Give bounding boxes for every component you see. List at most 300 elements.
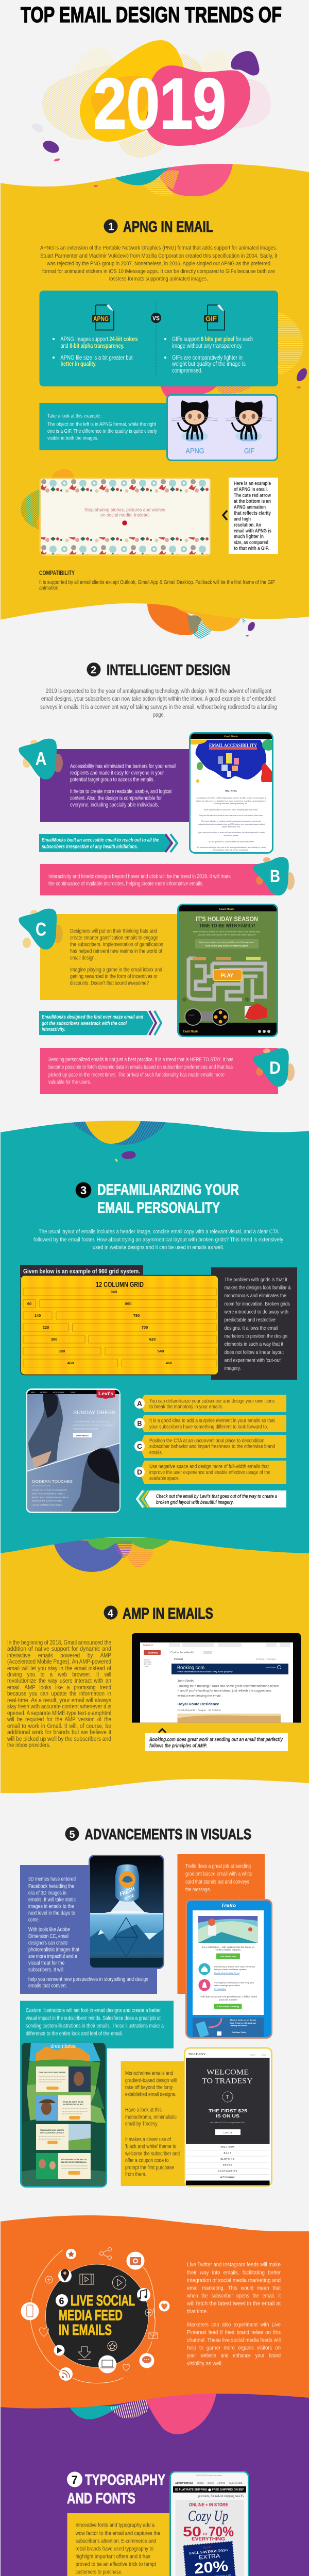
text block: AMP description: In the beginning of 2018, Gmail announced the (7, 1640, 111, 1646)
badge D (253, 1048, 295, 1087)
page background (0, 0, 309, 1108)
chart: 960 grid system: 460 (166, 1361, 172, 1365)
tip D: D (137, 1468, 142, 1476)
heading: 6 live social media feed (56, 2293, 135, 2338)
panel: typography description: retail brands have used typography to (76, 2546, 153, 2552)
image: octocat APNG vs GIF (167, 395, 277, 461)
heading: 6 live social media feed: MEDIA FEED (59, 2307, 123, 2324)
panel A: accessibility: potential target group to access the emails. (70, 777, 154, 783)
panel: 3D images: subscribers. It will (28, 1967, 63, 1973)
image: Levi's broken grid email phone: KIDS & BABY (53, 1392, 64, 1394)
panel: 3D images: era of 3D images in (28, 1890, 66, 1896)
badge A: A (35, 748, 46, 769)
heading: 3 defamiliarizing your email personality: EMAIL PERSONALITY (97, 1199, 220, 1216)
image: Salesforce Dreamforce email phone (21, 2042, 106, 2187)
GIF bullet list: GIFs support 8 bits per pixel for each (172, 336, 253, 343)
image: Aeropostale email phone: GIRLS (197, 2482, 204, 2484)
image: Tradesy email phone: USE IT (224, 2131, 232, 2134)
image: Levi's broken grid email phone: SUNDAY DRESS (73, 1410, 115, 1416)
callout: APNG example note: The cute red arrow (234, 493, 271, 498)
badge C: C (36, 919, 46, 940)
image: Salesforce Dreamforce email phone: SALESFORCE 01 JUS INST (63, 2104, 84, 2106)
section 6 background with wave (0, 2210, 309, 2409)
panel: 3D images: emails. It will take static (28, 1897, 76, 1903)
APNG bullet list: APNG file size is a bit greater but (61, 355, 133, 361)
image: Booking.com Gmail screenshot (132, 1633, 301, 1723)
text block: APNG compatibility (39, 570, 275, 591)
panel D: personalized emails: Sending personalized emails is not just a best practice, it is a trend that is HERE TO STAY. It has (48, 1057, 233, 1063)
heading: 7 typography and fonts: 7 (71, 2473, 78, 2486)
image: Tradesy email phone: SELL NOW (220, 2145, 235, 2148)
chart: 960 grid system: 620 (149, 1337, 156, 1342)
image: holiday maze game email phone: Email Monks (218, 908, 234, 911)
image: 3D juice can email phone: JUICE (124, 1894, 135, 1901)
text block: live social feed description: help to garner more organic visitors on (187, 2345, 281, 2351)
chart: 960 grid system: 300 (51, 1337, 57, 1342)
image: Tradesy email phone: BAGS (224, 2151, 231, 2155)
image: holiday maze game email phone: PLAY (221, 973, 234, 979)
panel: grids explanation: elements in such a way that it (225, 1341, 283, 1347)
hero blob illustration (31, 40, 271, 162)
image: 3D juice can email phone: FRESH (119, 1886, 136, 1897)
panel C: gamification: discounts. Doesn't that sound awesome? (70, 980, 149, 986)
image: Booking.com Gmail screenshot: Booking.com (177, 1665, 204, 1671)
tip C: subscriber behavior and impart freshness to the otherwise bland (149, 1444, 275, 1450)
panel: 3D images (20, 1865, 157, 1994)
panel: monochrome emails: Monochrome emails and (125, 2070, 173, 2076)
section 7 background with wave and blobs (0, 2385, 309, 2576)
panel: monochrome emails: prompt the first purchase (125, 2165, 174, 2171)
intro paragraph: grids: followed by the email footer. How about trying an asymmetrical layout with broken grids? This trend is extensively (33, 1236, 283, 1243)
image: Aeropostale email phone: 50 (183, 2524, 201, 2539)
image: Tradesy email phone (184, 2048, 272, 2186)
callout: APNG example note: APNG animation (234, 504, 266, 510)
tip B: It is a good idea to add a surprise element in your emails so that (149, 1418, 275, 1424)
panel: monochrome emails: gradient-based design will (125, 2077, 177, 2083)
image: holiday APNG email (40, 478, 210, 555)
panel: 3D images: are more impactful and a (28, 1954, 77, 1960)
image: email accessibility phone: proper alternative text. (222, 826, 241, 828)
panel B: interactivity: the continuance of mailable microsites, helping create more informative emails. (48, 881, 203, 887)
chart: 960 grid system: 460 (67, 1361, 74, 1365)
image: Aeropostale email phone: TO (202, 2533, 208, 2536)
panel: example explanation: one is a GIF. The difference in the quality is quite clearly (47, 428, 158, 434)
image: Levi's broken grid email phone: FREEDOM OF A PERFECT SUMMER (73, 1424, 114, 1426)
panel: custom illustrations: Custom illustrations will set foot in email designs and create a better (26, 2007, 161, 2013)
image: Trello email phone: Grab Trello for iOS, Android, (230, 2022, 256, 2024)
page background: middle (0, 1108, 309, 2205)
tip B: B (137, 1419, 142, 1427)
image: holiday maze game email phone: Can you help Mann reunite with his family this holiday season? (198, 934, 256, 936)
chart: 960 grid system: Given below is an example of 960 grid system. (23, 1268, 140, 1275)
image: holiday maze game email phone: Click on the play button to start the game. (205, 945, 249, 947)
image: Trello email phone: Desktop and more. (230, 2025, 247, 2027)
section 2 background with wave and blobs (0, 592, 309, 1108)
image: email accessibility phone: They use the web and email as much as others, but do not access it like them. (199, 815, 263, 817)
text block: AMP description: revolutionize the way users interact with an (7, 1678, 111, 1684)
image: Trello email phone: It's a celebration – with updates! Get the scoop on (202, 1946, 255, 1948)
image: Booking.com Gmail screenshot: Royal Route Residence (177, 1702, 219, 1706)
arrow note: EmailMonks accessible email: subscribers irrespective of any health inhibitions. (42, 844, 138, 850)
text block: live social feed description: your website and enhance your brand (187, 2352, 281, 2359)
panel: example explanation (39, 403, 168, 450)
panel D: personalized emails (40, 1048, 278, 1094)
panel: 3D images: With tools like Adobe (28, 1927, 70, 1933)
panel: monochrome emails: from them. (125, 2171, 146, 2177)
callout: APNG example note: that reflects clarity (234, 511, 271, 516)
image: email accessibility phone: Hey Friend, (225, 789, 237, 792)
image: Tradesy email phone: IS ON US (216, 2114, 240, 2119)
tip D: improve the user experience and enable effective usage of the (149, 1469, 270, 1476)
intro paragraph: APNG: was rejected by the PNG group in 2007. Nonetheless, in 2016, Apple singled out APNG as the preferred (46, 261, 270, 267)
panel B: interactivity: Interactivity and kinetic designs beyond hover and click will be the trend in 2019. It will mark (48, 874, 231, 880)
image: Trello email phone: Trello (221, 1903, 236, 1908)
tip A (134, 1395, 286, 1412)
image: Salesforce Dreamforce email phone: WITH SALESFORCE & GOOGLE (40, 2132, 64, 2134)
arrow note: maze email (39, 1011, 161, 1035)
image: Aeropostale email phone (170, 2472, 248, 2576)
tip D: Use negative space and design more of full-width emails that (149, 1463, 269, 1469)
panel: Trello gradient email (177, 1854, 265, 1994)
panel C: gamification: getting rewarded in the form of incentives or (70, 974, 158, 980)
image: Trello email phone: Trello's newest features. (215, 1948, 241, 1951)
image: Tradesy email phone: TRADESY (188, 2053, 207, 2056)
image: Aeropostale email phone: EXTRA (199, 2553, 220, 2561)
text block: AMP description: driving you to a web browser. It will (7, 1672, 111, 1678)
intro paragraph: intelligent design: 2019 is expected to be the year of amalgamating technology with design. With the advent of intelligent (46, 688, 272, 694)
callout: Booking.com note: follows the principles of AMP. (149, 1742, 207, 1749)
icon: VS badge: VS (152, 314, 160, 321)
icons: filled social circles (21, 2249, 170, 2381)
icon: APNG file (92, 304, 114, 330)
panel: monochrome emails: 'black and white' theme to (125, 2143, 176, 2149)
panel: monochrome emails: email by Tradesy. (125, 2121, 158, 2127)
text block: AMP description: opened. A separate MIME-type text-x-amphtml (7, 1710, 111, 1717)
chart: 960 grid system: 60 (27, 1301, 31, 1306)
image: Tradesy email phone: WELCOME (207, 2068, 249, 2076)
image: Aeropostale email phone: THE EXTRA 20% off online and in stores (196, 2475, 222, 2477)
image: holiday maze game email phone (178, 905, 277, 1037)
text block: AMP description: additional work for brands but we believe it (7, 1730, 112, 1736)
text block: AMP description: real-time. As a result, your email will always (7, 1698, 111, 1704)
image: Aeropostale email phone: just more, limited-ish shipping now $5 (198, 2494, 244, 2498)
image: Booking.com Gmail screenshot: 10:12 AM (1 hour ago) (256, 1658, 276, 1660)
panel: typography description (67, 2513, 170, 2576)
text block: AMP description: email. AMP looks like a promising trend (7, 1685, 111, 1691)
image: Aeropostale email phone: CLEARANCE (229, 2482, 243, 2484)
image: Booking.com Gmail screenshot: FREE cancellation on most rooms · Pay at the property (177, 1671, 233, 1673)
panel: 3D images: images in emails to the (28, 1903, 74, 1909)
arrow note: maze email: interactivity. (42, 1026, 65, 1032)
panel: 3D images: 3D memes have entered (28, 1876, 76, 1883)
image: Booking.com Gmail screenshot: Important (144, 1661, 151, 1663)
hero year 2019: 2019 (93, 64, 226, 144)
image: Trello email phone (186, 1900, 272, 2038)
text block: APNG compatibility: animation. (39, 585, 60, 591)
callout: APNG example note (229, 478, 278, 554)
panel: custom illustrations: sending custom illustrations in their emails. These illustrations make a (26, 2023, 164, 2029)
image: Tradesy email phone: TO TRADESY (202, 2077, 253, 2086)
panel: grids explanation: were introduced to do away with (224, 1309, 288, 1315)
image: email accessibility phone: We partnered with Pepe Kay, one of the leading authorities on accessibility, to create (197, 846, 266, 849)
image: email accessibility phone: Email Monks (224, 735, 238, 738)
intro paragraph: grids: The usual layout of emails includes a header image, concise email copy with a relevant visual, and a clear CTA (39, 1229, 279, 1235)
image: Trello email phone: Check Out Activity Feed (214, 1972, 239, 1974)
image: Trello email phone: better manage your alerts. (214, 1984, 241, 1987)
callout: Booking.com note (145, 1733, 288, 1751)
panel: 3D images: designers can create (28, 1940, 68, 1946)
image: email accessibility phone: They face difficulty in reading complex paragraphs passages, coming at (201, 820, 261, 822)
heading: 4 AMP in emails (104, 1605, 213, 1622)
text block: AMP description: stay fresh with accurate content whenever it is (7, 1704, 111, 1710)
text block: live social feed description: Marketers can also experiment with Live (187, 2321, 281, 2328)
image: Salesforce Dreamforce email phone: TRAILBLAZER INLTA (63, 2101, 83, 2103)
text block: live social feed description: integration of social media marketing and (187, 2277, 281, 2283)
heading: 2 intelligent design: 2 (91, 665, 96, 676)
panel C: gamification (40, 914, 177, 1000)
heading: 5 advancements in visuals: 5 (69, 1829, 75, 1840)
panel: 3D images: Facebook heralding the (28, 1884, 74, 1890)
panel: monochrome emails: welcome the subscriber and (125, 2150, 180, 2157)
APNG bullet list: better in quality. (61, 361, 97, 367)
heading: 6 live social media feed: IN EMAILS (59, 2322, 112, 2338)
arrow note: maze email: got the subscribers awestruck with the cool (41, 1020, 127, 1026)
panel: 3D images: visual treat for the (28, 1960, 65, 1966)
chart: 960 grid system: 780 (133, 1313, 140, 1318)
tip D: available space. (149, 1476, 180, 1482)
panel: grids explanation: imagery. (225, 1365, 241, 1371)
panel: grids explanation (211, 1267, 297, 1380)
text block: AMP description (7, 1640, 112, 1749)
text block: live social feed description: their way into emails, facilitating better (187, 2270, 281, 2276)
intro paragraph: APNG: Stuart Parmenter and Vladimir Vukićević from Mozilla Corporation created this specification in 2004. Sadly, it (40, 253, 277, 259)
panel: grids explanation: predictable and restrictive (225, 1317, 276, 1323)
image: Salesforce Dreamforce email phone: TURN IDEAS INTO APPS, FASTER (39, 2072, 65, 2074)
image: holiday maze game email phone: Use arrow keys to move and help Mann find his way home. (199, 941, 254, 943)
image: Booking.com Gmail screenshot: Sent Mail (144, 1663, 151, 1665)
text block: live social feed description: Live Twitter and Instagram feeds will make (187, 2262, 281, 2268)
image: email accessibility phone: According to the World Health Organization, out of 7.5 billion people on this planet, 1 (197, 797, 266, 799)
panel: typography description: customers to purchase. (76, 2569, 123, 2575)
callout: APNG example note: to that with a GIF. (234, 546, 269, 552)
panel C: gamification: email design. (70, 955, 96, 961)
panel C: gamification: create smarter gamification emails to engage (70, 935, 158, 941)
GIF bullet list: compromised. (172, 368, 202, 374)
intro paragraph: APNG: APNG is an extension of the Portable Network Graphics (PNG) format that adds support for animated images. (40, 245, 277, 251)
text block: live social feed description: Pinterest feed if their brand relies on this (187, 2330, 281, 2336)
image: Levi's broken grid email phone: CUTOUT TO CATCH THOSE (32, 1500, 62, 1502)
image: Booking.com Gmail screenshot: Custom homefeeds! (170, 1651, 194, 1654)
social circle illustration with heading (21, 2247, 170, 2383)
badge A (19, 739, 63, 779)
image: holiday maze game email phone: Email Monks (182, 1029, 198, 1033)
image: Levi's broken grid email phone: LIGHT ON YOUR SHOULDERS (32, 1489, 67, 1491)
panel: example explanation: The object on the left is in APNG format, while the right (47, 421, 156, 428)
image: Salesforce Dreamforce email phone: SALESFORCE ESSENTIALS (61, 2161, 87, 2163)
decorative blobs around comparison panel (160, 311, 307, 399)
panel: 3D images: Dimension CC, email (28, 1933, 68, 1939)
callout: APNG example note: resolution. An (234, 522, 261, 528)
image: Aeropostale email phone: 70% (209, 2524, 234, 2539)
panel A: accessibility: everyone, including specially able individuals. (70, 802, 159, 808)
section 4 background with wave and blobs (0, 1530, 309, 1798)
tip B: your subscribers have something different to look forward to. (149, 1424, 268, 1430)
badge C (19, 909, 63, 950)
icon: GIF file: GIF (205, 315, 217, 323)
image: Aeropostale email phone: FALL SAVINGS PASS (189, 2548, 228, 2555)
heading: 2 intelligent design: INTELLIGENT DESIGN (107, 662, 230, 679)
intro paragraph: APNG: format for animated stickers in iOS 10 iMessage apps. It can be directly compared to GIFs because both are (42, 268, 275, 275)
panel: monochrome emails: established email designs. (125, 2092, 176, 2098)
image: Levi's broken grid email phone: WEEKEND EMBODIED (73, 1428, 98, 1430)
intro paragraph: intelligent design (40, 688, 277, 718)
panel: custom illustrations: visual impact in the subscribers' minds. Salesforce does a great job at (26, 2015, 161, 2022)
badge B: B (270, 867, 280, 886)
image: Booking.com Gmail screenshot: Gmail ▾ (143, 1644, 153, 1647)
tip A: You can defamiliarize your subscriber and design your own icons (149, 1398, 275, 1404)
GIF bullet list: image without any transparency. (172, 343, 243, 349)
image: 3D juice can email phone (90, 1856, 164, 1968)
image: Tradesy email phone: SELL (262, 2054, 266, 2056)
panel: grids explanation: does not follow a linear layout (225, 1349, 284, 1355)
image: Booking.com Gmail screenshot: John Smith, (177, 1680, 195, 1683)
text block: live social feed description: visibility as well. (187, 2361, 222, 2367)
text block: live social feed description: when the subscriber opens the email, it (186, 2293, 281, 2299)
image: Booking.com Gmail screenshot: – and if you're looking for more ideas, just refresh the suggestions (177, 1689, 272, 1693)
image: holiday maze game email phone: Mann's family is waiting for him to reach home. But he has lost his way. (193, 930, 260, 933)
image: Aeropostale email phone: ONLINE + IN STORE (189, 2503, 229, 2507)
heading: 6 live social media feed: 6 (59, 2296, 64, 2306)
icon: red arrow (122, 520, 127, 526)
panel: grids explanation: monotonous and eliminates the (225, 1293, 286, 1299)
text block: AMP description: interactive emails powered by AMP (7, 1653, 111, 1659)
panel A: accessibility: It helps to create more readable, usable, and logical (70, 788, 171, 794)
section 1 background with wave and blobs (0, 149, 309, 623)
image: Trello email phone: Reimagined notifications that help you (214, 1981, 254, 1984)
panel C: gamification: the subscribers. Implementation of gamification (70, 942, 163, 948)
image: octocat APNG vs GIF: GIF (244, 447, 254, 455)
image: Levi's broken grid email phone: Levi's (98, 1391, 113, 1396)
intro paragraph: grids (33, 1229, 283, 1251)
image: Levi's broken grid email phone: MODERN TOUCHES (32, 1480, 73, 1484)
callout: APNG example note: at the bottom is an (234, 499, 271, 504)
panel: example explanation: Take a look at this example. (47, 413, 101, 419)
panel: monochrome emails: It makes a clever use of (125, 2137, 171, 2143)
heading: 1 APNG in email: 1 (108, 221, 114, 233)
panel: Trello gradient email: gradient-based email with a white (185, 1871, 252, 1877)
image: email accessibility phone (190, 733, 274, 853)
arrow note: EmailMonks accessible email: EmailMonks built an accessible email to reach out to all the (42, 837, 159, 843)
tip C: emails. (149, 1450, 163, 1456)
icon: VS badge (151, 313, 161, 323)
icons: outline symbols (40, 2247, 158, 2371)
image: Trello email phone: Trello just surpassed a huge milestone: 2 billion thank (199, 1995, 258, 1998)
panel: monochrome emails: monochrome, minimalistic (125, 2114, 177, 2121)
image: Tradesy email phone: use code GIFT25 on any purchase $50+ (210, 2122, 246, 2124)
image: Trello email phone: See What's New (220, 1955, 236, 1958)
image: Salesforce Dreamforce email phone: GET YOUR FREE 30-DAY TRIAL OF (61, 2159, 87, 2161)
callout: APNG example note: and high (234, 516, 251, 522)
heading: 3 defamiliarizing your email personality: DEFAMILIARIZING YOUR (97, 1181, 239, 1198)
image: email accessibility phone: billion live with a form of disability from vision impairment, cognitive, neurological and (197, 800, 266, 802)
panel B: interactivity (40, 864, 278, 895)
text block: AMP description: will be picked up well by the subscribers and (7, 1736, 111, 1742)
heading: 1 APNG in email (104, 218, 213, 235)
tip B (134, 1415, 286, 1432)
panel: monochrome emails: take off beyond the long- (125, 2084, 174, 2091)
panel: typography description: Innovative fonts and typography add a (76, 2522, 155, 2529)
image: email accessibility phone: So, the question is - How to create an accessible email? (209, 841, 254, 843)
panel A: accessibility: content. Also, the design is comprehendible for (70, 795, 162, 802)
tip C (134, 1435, 286, 1458)
tip A: to break the monotony in your emails. (149, 1403, 223, 1410)
text block: APNG compatibility: COMPATIBILITY (39, 570, 75, 577)
intro paragraph: grids: used in website designs and it can be used in emails as well. (93, 1245, 224, 1251)
list: defamiliarizing tips A to D (134, 1395, 286, 1484)
badge B (253, 857, 295, 895)
image: email accessibility phone: What happens when a subscriber with a disability gets your email? (204, 809, 258, 811)
panel: custom illustrations: difference to the entire look and feel of the email. (26, 2031, 123, 2037)
panel C: gamification: Designers will put on their thinking hats and (70, 928, 157, 935)
image: holiday maze game email phone: IT'S HOLIDAY SEASON (196, 915, 258, 923)
image: Levi's broken grid email phone: LIGHT SUMMER BREEZES (32, 1504, 63, 1506)
page background: lower (0, 2205, 309, 2576)
chart: 960 grid system (20, 1265, 218, 1375)
image: email accessibility phone: understanding/multiple navigation links and CTA buttons, and processing images without (198, 823, 265, 825)
image: Aeropostale email phone: $5 FLAT RATE SHIPPING ⬤ FREE SHIPPING ON $50* (175, 2488, 244, 2492)
chart: 960 grid system: 140 (35, 1313, 41, 1318)
image: Booking.com Gmail screenshot: Starred (144, 1659, 150, 1661)
text block: AMP description: (Accelerated Mobile Pages). An AMP-powered (7, 1659, 111, 1665)
panel: grids explanation: The problem with grids is that it (225, 1277, 287, 1283)
text block: AMP description: addition of native support for dynamic and (7, 1646, 111, 1652)
panel: example explanation: visible in both the images. (47, 435, 98, 441)
image: Tradesy email phone: T (226, 2095, 229, 2100)
panel: Trello gradient email: Trello does a great job at sending (185, 1863, 251, 1869)
text block: AMP description: the inbox providers. (7, 1742, 50, 1749)
image: Tradesy email phone: SHOES (223, 2164, 232, 2166)
image: Tradesy email phone: WEDDINGS (220, 2176, 235, 2178)
panel: 3D images: next level in the days to (28, 1910, 75, 1917)
heading: 3 defamiliarizing your email personality: 3 (80, 1184, 87, 1197)
tip C: C (137, 1442, 142, 1450)
image: Trello email phone: with your tasks and team updates. (214, 1968, 247, 1971)
panel: monochrome emails (121, 2061, 186, 2186)
text block: AMP description: email to work in Gmail. It will, of course, be (7, 1723, 111, 1730)
heading: 7 typography and fonts: AND FONTS (67, 2490, 135, 2507)
image: Aeropostale email phone: EVERYTHING (192, 2536, 225, 2541)
panel: 3D images: emails that convert. (28, 1982, 67, 1989)
panel: typography description: highlight important offers and it has (76, 2553, 150, 2560)
APNG bullet list (53, 336, 138, 367)
image: Tradesy email phone: SHOP (250, 2054, 256, 2056)
callout: APNG example note: of APNG in email. (234, 487, 268, 493)
intro paragraph: APNG (40, 245, 277, 282)
chart: 960 grid system: 540 (158, 1349, 164, 1353)
arrow: callout pointer (223, 511, 227, 520)
image: Trello email phone: Get Notified (214, 1988, 226, 1990)
chart: 960 grid system: 220 (43, 1325, 49, 1330)
panel C: gamification: Imagine playing a game in the email inbox and (70, 967, 162, 973)
panel A: accessibility: recipients and made it easy for everyone in your (70, 770, 164, 776)
APNG bullet list: APNG images support 24-bit colors (61, 336, 138, 343)
image: Trello email phone: yous are in order! (219, 1998, 237, 2001)
image: Aeropostale email phone: Cozy Up (188, 2507, 228, 2524)
GIF bullet list: GIFs are comparatively lighter in (172, 355, 243, 361)
image: Trello email phone: Get More Trello (232, 2031, 246, 2033)
icon: APNG file: APNG (93, 315, 109, 323)
intro paragraph: APNG: lossless formats supporting animated images. (109, 276, 208, 282)
